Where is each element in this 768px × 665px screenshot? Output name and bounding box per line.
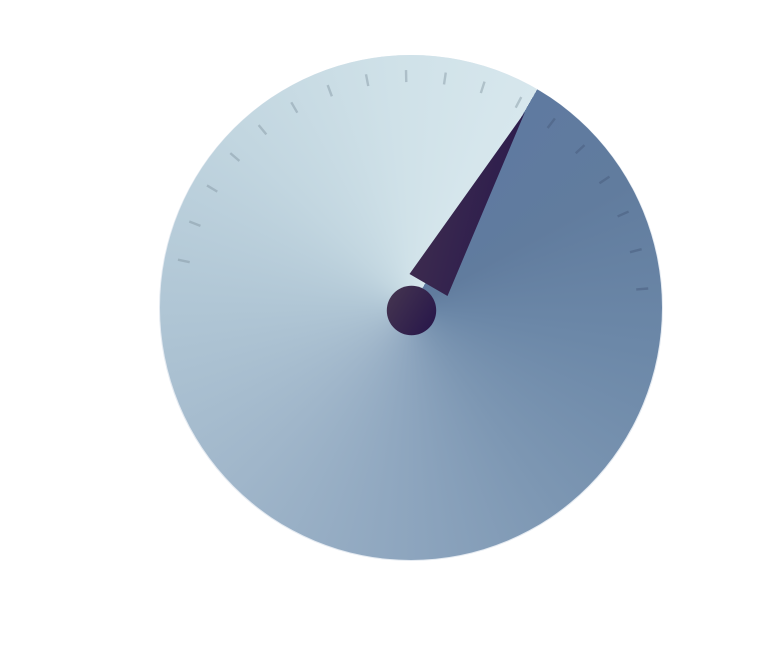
gauge rim: [159, 55, 663, 561]
needle: [410, 112, 525, 296]
gauge dial: [160, 55, 662, 560]
tick marks: light side: [178, 70, 521, 262]
needle hub: [387, 286, 436, 335]
tick marks: dark side: [548, 118, 648, 289]
